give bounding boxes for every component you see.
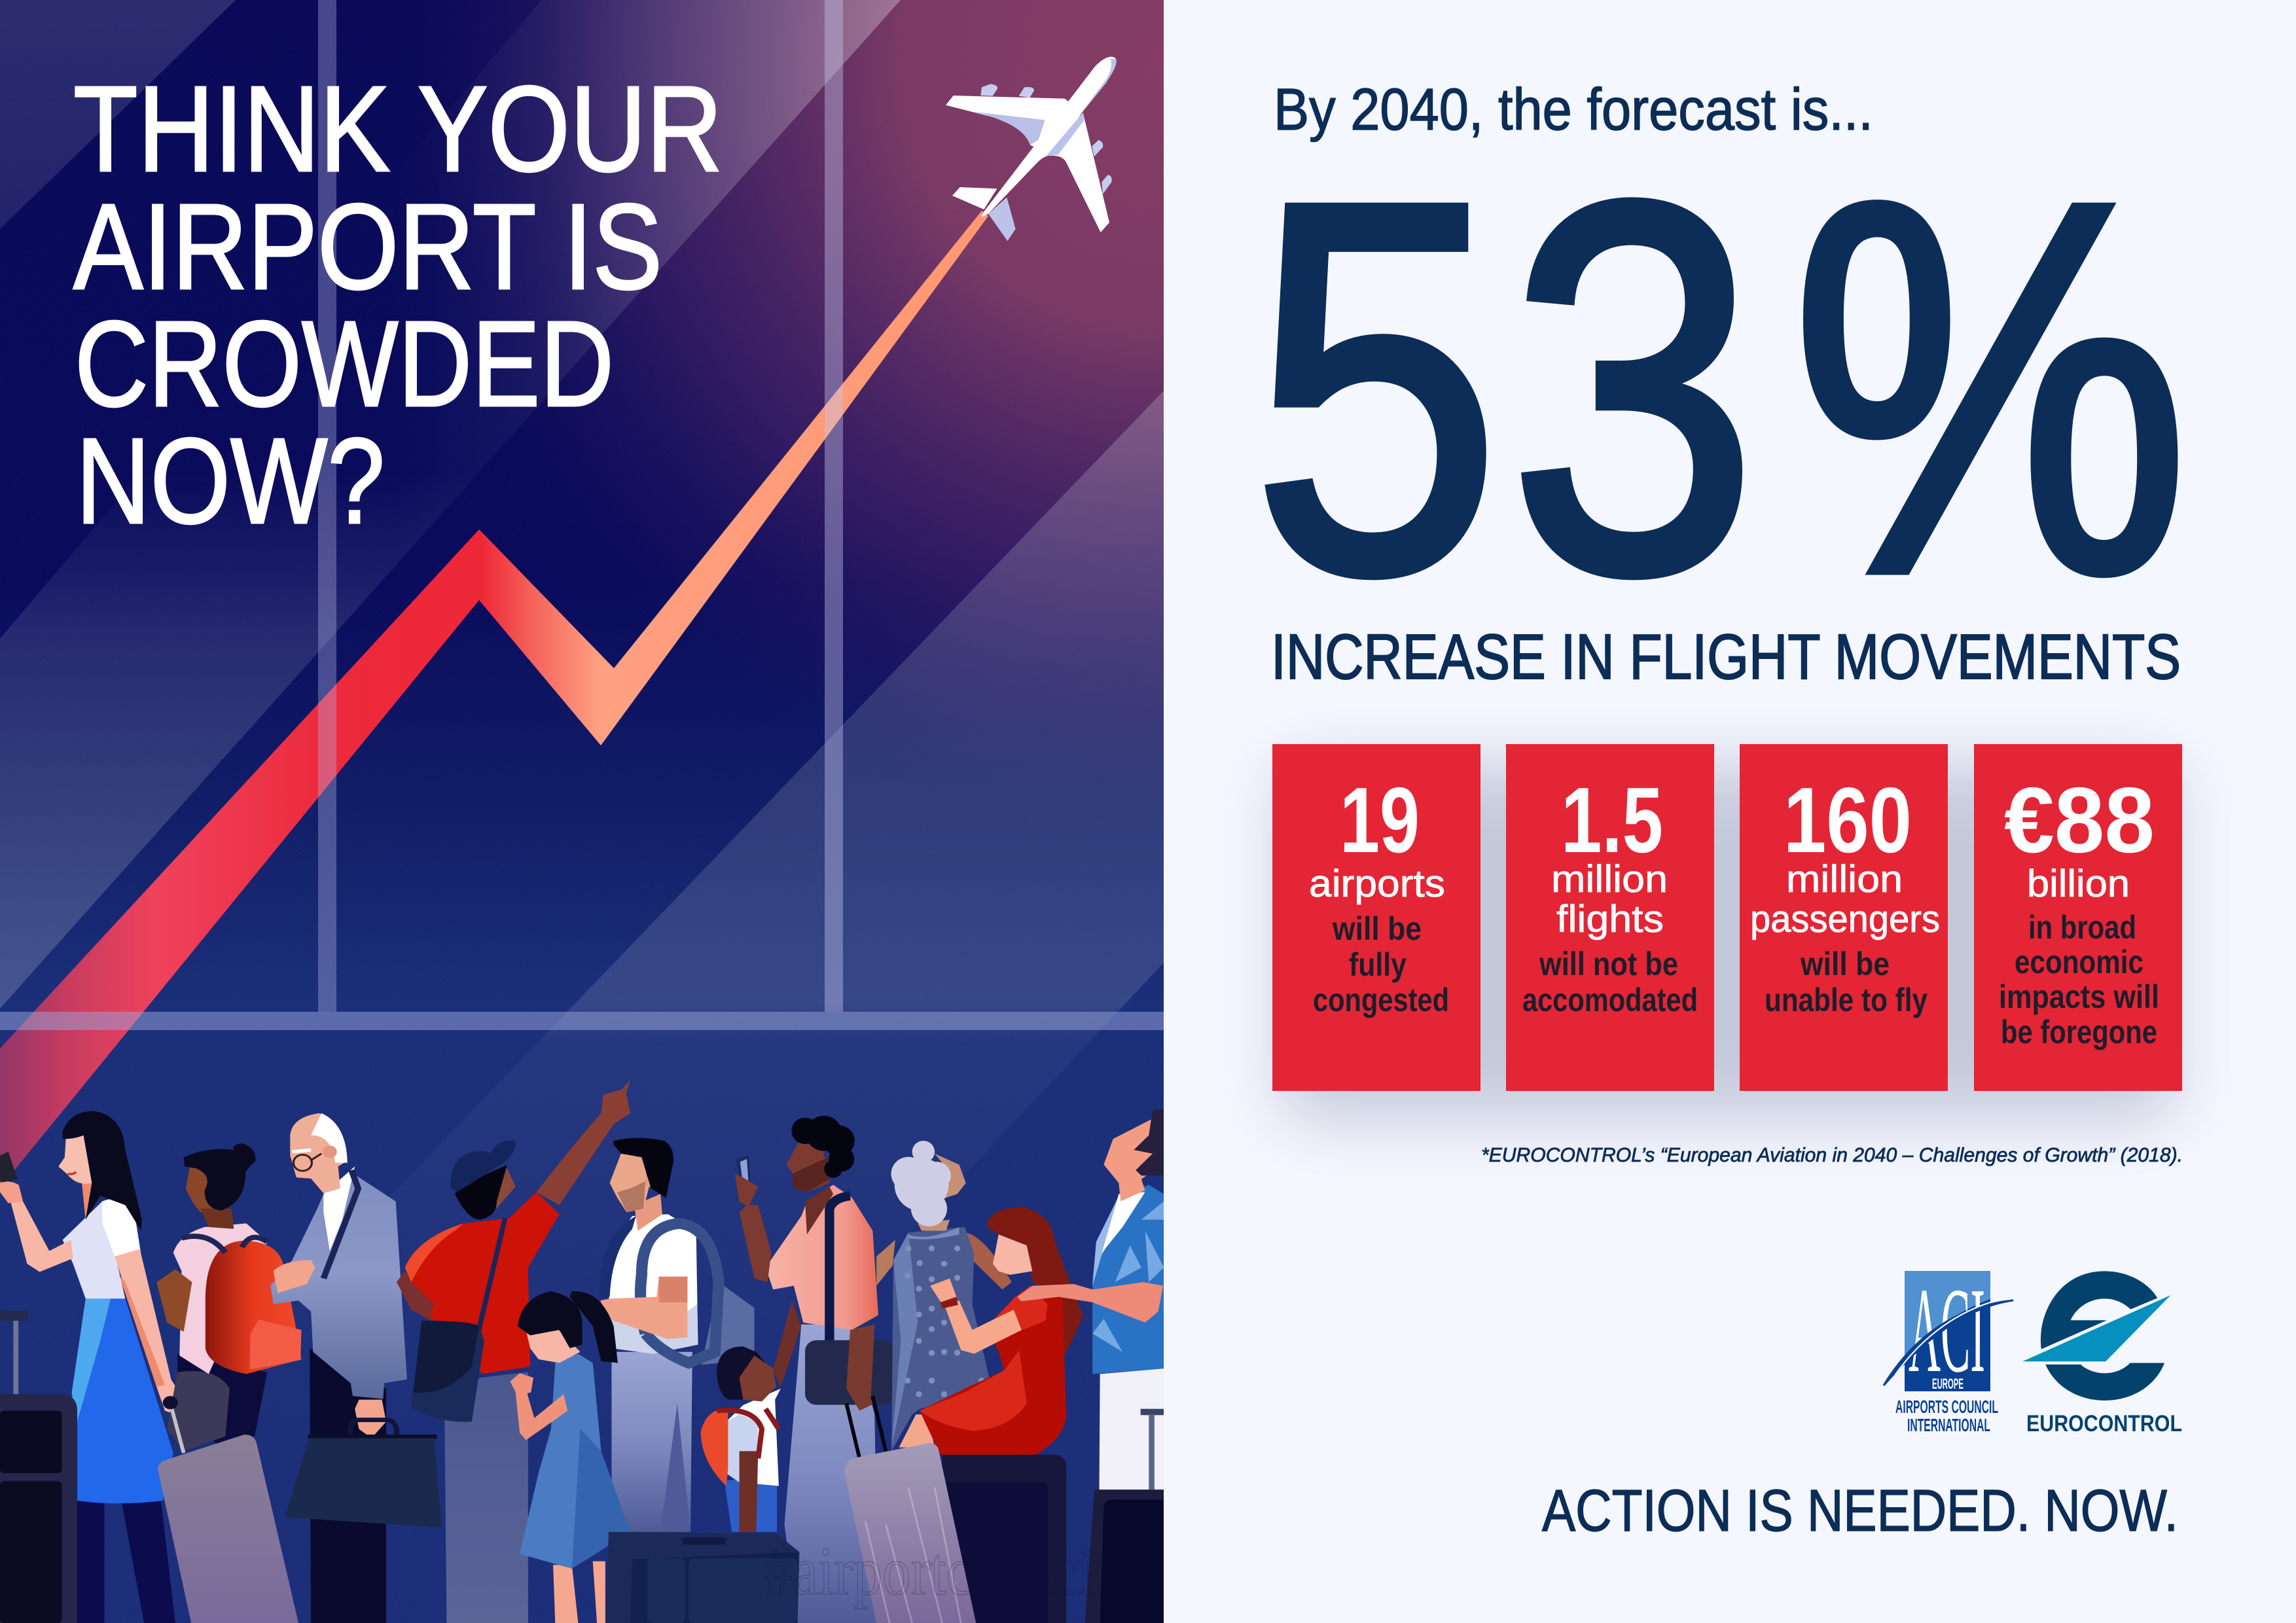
person: woman in red dress sitting on suitcase <box>899 1207 1083 1623</box>
watermark hashtag: #airportcapacity <box>764 1533 1138 1609</box>
person: boy with backpack <box>700 1300 801 1532</box>
person: man in blue Hawaiian shirt <box>1017 1109 1164 1623</box>
rising line chart arrow <box>0 211 988 1188</box>
card: airports: congested <box>1313 982 1449 1018</box>
card: billion: be foregone <box>2001 1014 2157 1050</box>
card: flights <box>1506 744 1714 1091</box>
card: airports: fully <box>1349 946 1407 983</box>
card shadows <box>1283 766 2173 1119</box>
person: man in red shirt pointing <box>397 1080 630 1623</box>
person: woman with phone <box>0 1111 184 1623</box>
call to action: ACTION IS NEEDED. NOW. <box>1542 1478 2178 1544</box>
card: billion: impacts will <box>1999 978 2159 1015</box>
panel: forecast: ACI <box>1909 1263 1985 1398</box>
source footnote: *EUROCONTROL’s “European Aviation in 2040 – Challenges of Growth” (2018). <box>1481 1143 2183 1166</box>
person: older man in grey jacket with briefcase <box>270 1113 442 1623</box>
logo: ACI Europe <box>1884 1263 2013 1435</box>
card: flights: flights <box>1556 898 1664 940</box>
icon: airplane <box>946 57 1117 241</box>
card: passengers <box>1740 744 1948 1091</box>
card: billion: in broad <box>2028 909 2136 946</box>
title: AIRPORT IS <box>73 179 662 315</box>
title: CROWDED <box>75 296 614 432</box>
person: bearded man with phone <box>735 1116 895 1623</box>
big number: 53% <box>1252 94 2189 682</box>
person: man with white tee and backpack <box>600 1138 755 1532</box>
card: passengers: will be <box>1800 946 1890 982</box>
window background gradient <box>0 0 1164 1623</box>
luggage: left dark suitcase and grey suitcase <box>0 1311 298 1623</box>
logo: EUROCONTROL: EUROCONTROL <box>2026 1411 2182 1436</box>
card: passengers: million <box>1786 858 1903 901</box>
window frame <box>0 0 1164 1030</box>
card: airports: 19 <box>1340 768 1420 872</box>
card: billion: €88 <box>2004 768 2155 872</box>
person: girl in blue dress checking watch <box>510 1291 630 1623</box>
crowd of passengers <box>0 1080 1164 1623</box>
card: flights: million <box>1551 858 1668 901</box>
card: airports <box>1272 744 1480 1091</box>
luggage: foreground suitcases <box>606 1443 976 1623</box>
card: airports: will be <box>1332 910 1422 947</box>
card: airports: airports <box>1309 863 1445 905</box>
logo: ACI Europe: AIRPORTS COUNCIL <box>1895 1397 1998 1417</box>
panel: illustration <box>0 0 1164 1623</box>
person: older woman in dotted dress <box>876 1141 1012 1451</box>
card: passengers: unable to fly <box>1765 982 1928 1018</box>
logo: EUROCONTROL <box>2022 1271 2182 1436</box>
logo: ACI Europe: INTERNATIONAL <box>1907 1415 1990 1435</box>
logo: ACI Europe: EUROPE <box>1932 1376 1964 1392</box>
title: NOW? <box>76 414 385 549</box>
title <box>73 62 723 549</box>
card: flights: accomodated <box>1522 982 1698 1018</box>
card: billion: economic <box>2015 944 2144 980</box>
card: passengers: passengers <box>1750 898 1940 940</box>
card: flights: will not be <box>1539 946 1678 982</box>
intro heading: By 2040, the forecast is... <box>1274 77 1873 143</box>
card: billion <box>1974 744 2182 1091</box>
person: girl with red backpack <box>156 1143 301 1451</box>
card: billion: billion <box>2027 863 2130 905</box>
title: THINK YOUR <box>73 62 723 197</box>
card: passengers: 160 <box>1784 768 1912 872</box>
panel: forecast <box>1251 77 2189 1544</box>
card: flights: 1.5 <box>1561 768 1663 872</box>
